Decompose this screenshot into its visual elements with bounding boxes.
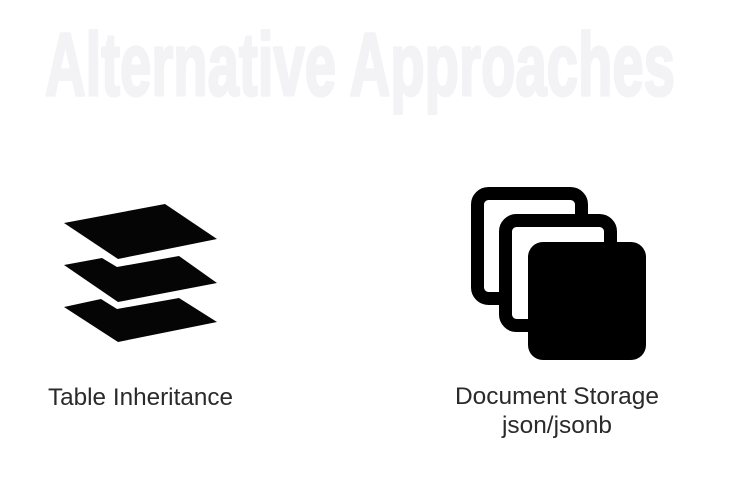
icon: stacked layers: [64, 204, 217, 342]
icon: stacked documents: [478, 194, 646, 360]
label: table inheritance: Table Inheritance: [48, 384, 233, 411]
label: document storage: Document Storage: [455, 383, 659, 410]
label: document storage: json/jsonb: [501, 412, 612, 439]
label: document storage: [455, 383, 659, 439]
